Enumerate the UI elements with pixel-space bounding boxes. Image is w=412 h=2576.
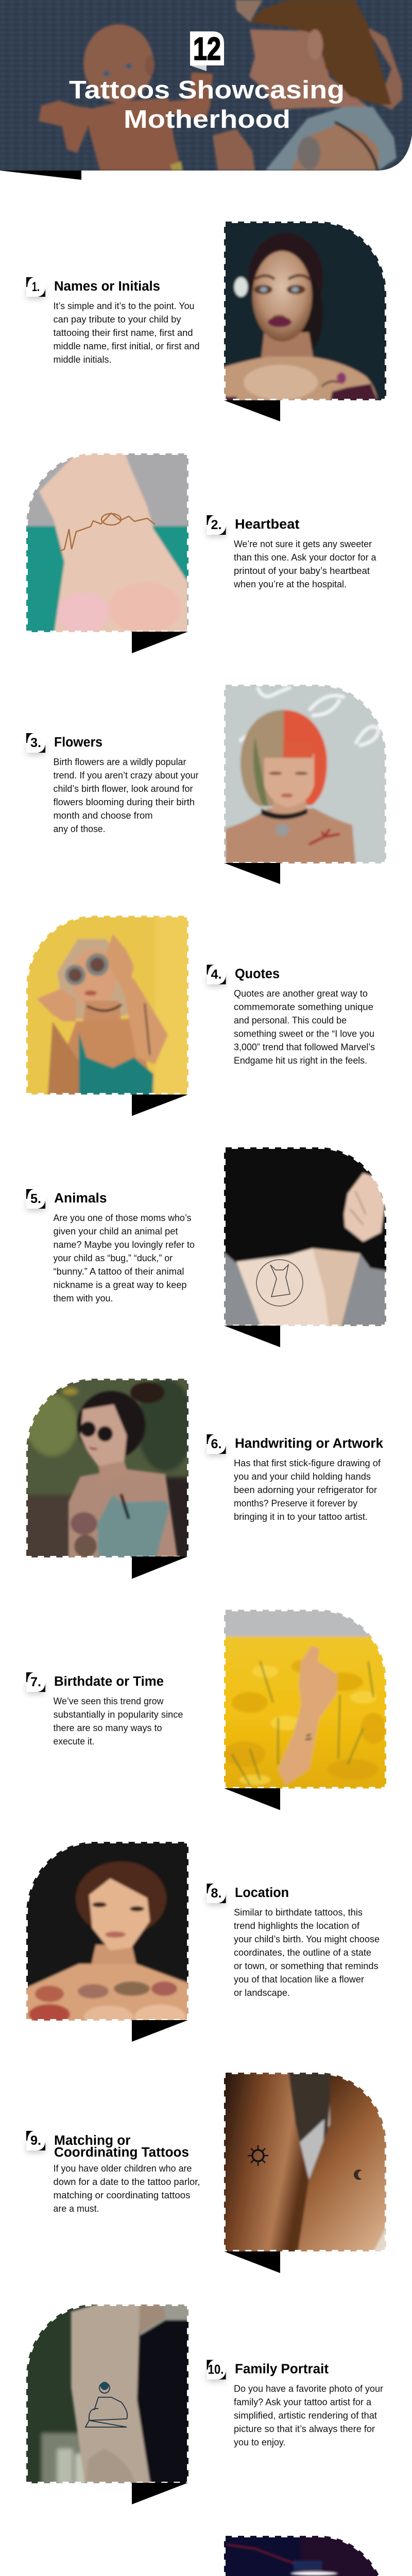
body text: printout of your baby’s heartbeat <box>234 565 370 576</box>
body text: down for a date to the tattoo parlor, <box>54 2176 200 2187</box>
number badge: 2. <box>211 518 221 532</box>
body text: there are so many ways to <box>54 1722 162 1733</box>
body text <box>234 988 375 1065</box>
photo: arm in yellow flower field <box>224 1609 386 1789</box>
body text: middle name, first initial, or first and <box>54 341 200 351</box>
body text: them with you. <box>54 1293 113 1303</box>
photo: arm with family portrait tattoo <box>26 2304 188 2483</box>
body text <box>233 538 376 589</box>
body text <box>234 1907 380 1998</box>
number badge: 6. <box>211 1437 221 1451</box>
heading: Quotes <box>235 967 280 981</box>
body text: Endgame hit us right in the feels. <box>234 1055 367 1065</box>
body text: month and choose from <box>54 810 152 821</box>
body text: trend highlights the location of <box>234 1920 360 1931</box>
body text: picture so that it’s always there for <box>234 2424 375 2434</box>
body text <box>54 756 199 834</box>
body text: bringing it in to your tattoo artist. <box>234 1511 368 1522</box>
body text: can pay tribute to your child by <box>54 314 181 325</box>
number badge: 3. <box>30 736 41 750</box>
number badge: 1. <box>32 280 40 294</box>
tail <box>132 2020 188 2042</box>
body text: your child’s birth. You might choose <box>234 1934 380 1944</box>
body text: been adorning your refrigerator for <box>234 1484 377 1495</box>
heading <box>54 2133 189 2160</box>
header photo: mother and baby <box>0 0 412 171</box>
body text: trend. If you aren’t crazy about your <box>54 770 199 781</box>
body text: or landscape. <box>234 1987 290 1998</box>
photo: woman with chest tattoos <box>26 1842 188 2021</box>
body text: your child as “bug,” “duck,” or <box>54 1252 173 1263</box>
photo: woman with name tattoo <box>224 222 386 400</box>
body text <box>54 2163 200 2214</box>
number badge <box>207 1884 226 1905</box>
tail <box>224 1788 280 1810</box>
photo: woman with sunglasses and quote tattoo <box>26 916 188 1094</box>
number badge: 10. <box>208 2363 224 2377</box>
tail <box>132 1094 188 1116</box>
header wedge <box>0 171 81 180</box>
title <box>69 76 345 133</box>
number badge: 7. <box>30 1675 41 1689</box>
body text: matching or coordinating tattoos <box>54 2190 191 2200</box>
panel: 7 birthdate or time <box>26 1604 391 1810</box>
body text: months? Preserve it forever by <box>234 1498 358 1509</box>
body text: you of that location like a flower <box>234 1974 364 1985</box>
heading: Birthdate or Time <box>54 1674 164 1689</box>
title: Tattoos Showcasing <box>69 76 345 104</box>
number badge <box>26 277 45 299</box>
body text: or town, or something that reminds <box>234 1960 379 1971</box>
body text: Are you one of those moms who’s <box>54 1212 192 1223</box>
tail <box>132 1556 188 1579</box>
body text: something sweet or the “I love you <box>234 1028 374 1039</box>
panel: 11 foot or handprint <box>224 2536 379 2576</box>
number badge <box>26 1189 45 1211</box>
number badge <box>207 515 226 537</box>
body text: “bunny.” A tattoo of their animal <box>54 1266 184 1277</box>
body text: tattooing their first name, first and <box>54 327 193 338</box>
number badge <box>207 1434 226 1456</box>
body text: coordinates, the outline of a state <box>234 1947 371 1958</box>
body text: and personal. This could be <box>234 1015 347 1025</box>
heading: Handwriting or Artwork <box>235 1436 384 1451</box>
body text: Similar to birthdate tattoos, this <box>234 1907 363 1918</box>
number badge: 5. <box>30 1192 41 1206</box>
panel: 5 animals <box>26 1142 391 1347</box>
body text: simplified, artistic rendering of that <box>234 2410 377 2420</box>
body text <box>234 2383 383 2447</box>
body text: than this one. Ask your doctor for a <box>234 552 376 563</box>
body text: Birth flowers are a wildly popular <box>54 756 186 767</box>
photo: woman in sunglasses with arm tattoo <box>26 1379 188 1557</box>
number badge: 8. <box>211 1886 221 1901</box>
photo: two arms with sun and moon tattoos <box>224 2073 386 2251</box>
body text: flowers blooming during their birth <box>54 796 195 807</box>
header panel <box>0 0 412 180</box>
body text <box>234 1458 381 1522</box>
number badge: 4. <box>211 968 221 982</box>
number badge <box>207 2360 226 2381</box>
body text: commemorate something unique <box>234 1002 373 1012</box>
body text: Do you have a favorite photo of your <box>234 2383 383 2394</box>
body text: middle initials. <box>54 354 111 365</box>
number badge 12: 12 <box>193 31 221 67</box>
title: Motherhood <box>124 106 290 133</box>
number badge <box>26 1672 45 1694</box>
body text: If you have older children who are <box>54 2163 192 2174</box>
body text: Has that first stick-figure drawing of <box>234 1458 381 1468</box>
panel: 3 flowers <box>26 680 391 884</box>
tail <box>224 400 280 421</box>
tail <box>224 863 280 884</box>
body text: It’s simple and it’s to the point. You <box>54 300 195 311</box>
panel: 1 names or initials <box>26 216 391 421</box>
body text <box>54 1696 183 1747</box>
body text: you to enjoy. <box>234 2437 285 2447</box>
body text: given your child an animal pet <box>54 1226 178 1236</box>
panel: 4 quotes <box>21 911 375 1116</box>
heading: Names or Initials <box>54 279 160 294</box>
number badge: 9. <box>30 2133 41 2148</box>
body text: substantially in popularity since <box>54 1709 183 1720</box>
number badge <box>26 2131 45 2153</box>
body text: are a must. <box>54 2203 99 2214</box>
photo: thigh with geometric cat tattoo <box>224 1147 386 1326</box>
heading: Animals <box>54 1191 107 1206</box>
body text <box>54 1212 195 1303</box>
panel: 6 handwriting or artwork <box>21 1374 384 1579</box>
body text: any of those. <box>54 823 105 834</box>
photo: wrist with heartbeat tattoo <box>26 453 188 632</box>
heading: Heartbeat <box>235 517 300 532</box>
tail <box>132 2483 188 2504</box>
heading: Coordinating Tattoos <box>54 2145 189 2160</box>
heading: Family Portrait <box>235 2362 329 2376</box>
number badge <box>26 733 45 755</box>
body text: name? Maybe you lovingly refer to <box>54 1239 195 1250</box>
body text: We’ve seen this trend grow <box>54 1696 164 1706</box>
heading: Location <box>235 1886 289 1900</box>
number badge <box>207 964 226 986</box>
body text: We’re not sure it gets any sweeter <box>234 538 372 549</box>
body text: family? Ask your tattoo artist for a <box>234 2397 372 2407</box>
body text: 3,000” trend that followed Marvel’s <box>234 1042 375 1052</box>
body text: execute it. <box>54 1736 95 1747</box>
panel: 8 location <box>21 1837 380 2042</box>
panel: 2 heartbeat <box>21 448 376 653</box>
body text: child’s birth flower, look around for <box>54 783 193 794</box>
body text: Quotes are another great way to <box>234 988 368 998</box>
tail <box>224 1326 280 1347</box>
heading: Matching or <box>54 2133 131 2148</box>
body text: you and your child holding hands <box>234 1471 371 1482</box>
tail <box>132 632 188 653</box>
panel: 9 matching or coordinating tattoos <box>26 2067 391 2273</box>
heading: Flowers <box>54 735 102 750</box>
body text <box>54 300 200 365</box>
body text: when you’re at the hospital. <box>233 579 347 589</box>
tail <box>224 2251 280 2273</box>
panel: 10 family portrait <box>21 2299 383 2504</box>
photo: woman with flower tattoo <box>224 685 386 863</box>
body text: nickname is a great way to keep <box>54 1279 186 1290</box>
photo: tattoo artist working under lamp <box>224 2536 379 2576</box>
